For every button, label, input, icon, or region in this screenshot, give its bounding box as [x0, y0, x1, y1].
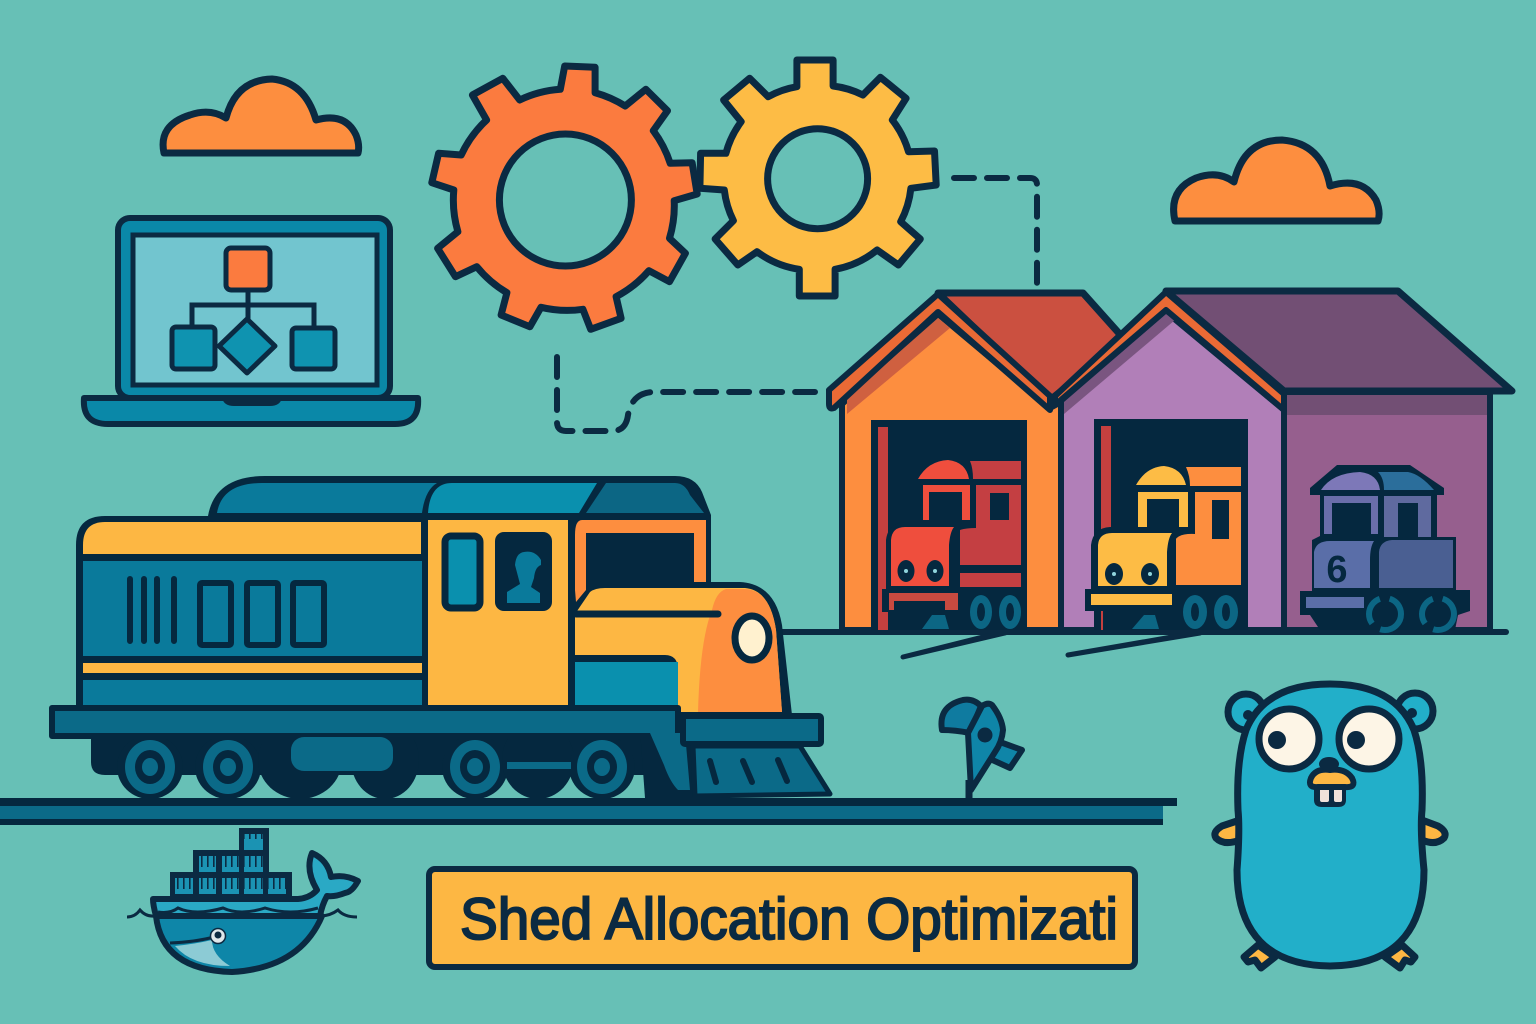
- muzzle and nose: [1310, 757, 1353, 787]
- front deck: [683, 716, 821, 744]
- arrow: dashed connector from yellow gear to shed: [954, 178, 1037, 283]
- cab door panel: [428, 520, 568, 705]
- shed: orange front: [829, 294, 1061, 630]
- undercarriage: [91, 721, 700, 799]
- locomotive: blue: [1300, 465, 1470, 630]
- teeth: [1314, 782, 1346, 807]
- icon: right cloud: [1174, 140, 1379, 221]
- title banner: Shed Allocation Optimizati: [460, 887, 1118, 952]
- waterline scallops: [158, 908, 318, 912]
- ears: [1228, 693, 1433, 730]
- body silhouette: [76, 476, 800, 730]
- body: [1237, 684, 1424, 966]
- arrow: dashed connector from orange gear to shed: [557, 357, 815, 431]
- eyes: [1259, 709, 1399, 769]
- wheels: [125, 733, 690, 794]
- panel: sheds: [829, 291, 1512, 630]
- cab window with driver: [495, 532, 552, 611]
- whale eye: [170, 928, 226, 944]
- icon: gopher mascot: [1215, 684, 1445, 968]
- hull and tail: [153, 853, 358, 916]
- whale belly: [175, 940, 230, 966]
- railway track: [0, 798, 1177, 825]
- headlight: [735, 616, 769, 660]
- ground line by sheds: [780, 629, 1506, 635]
- icon: left cloud: [163, 79, 359, 153]
- shipping containers: [170, 828, 292, 897]
- locomotive: red: [882, 460, 1021, 630]
- title banner: [429, 869, 1135, 967]
- running deck: [52, 708, 678, 736]
- shed: orange back roof: [938, 293, 1125, 400]
- front cab: [575, 520, 706, 602]
- track switch lines: [903, 633, 1200, 657]
- arms: [1215, 820, 1445, 843]
- icon: orange gear: [432, 66, 697, 329]
- panel: main locomotive: [52, 476, 830, 799]
- icon: docker whale: [127, 828, 358, 972]
- cab window: [445, 536, 480, 608]
- number six on locomotive: 6: [1326, 549, 1348, 591]
- icon: railway signal: [941, 700, 1022, 798]
- feet: [1244, 945, 1415, 968]
- flowchart diagram: [172, 248, 335, 373]
- shed: purple front: [1055, 292, 1284, 630]
- locomotive: yellow: [1085, 466, 1241, 630]
- shed: purple with back wall: [1166, 291, 1512, 630]
- cowcatcher: [693, 746, 830, 796]
- whale body: [156, 916, 322, 972]
- sea line: [127, 910, 357, 917]
- long hood stripes: [83, 522, 422, 705]
- icon: yellow gear: [700, 60, 936, 296]
- locomotive nose: [575, 588, 782, 712]
- roof panels: [217, 483, 704, 513]
- hood grille and vents: [130, 579, 324, 645]
- icon: laptop with flowchart: [84, 218, 418, 424]
